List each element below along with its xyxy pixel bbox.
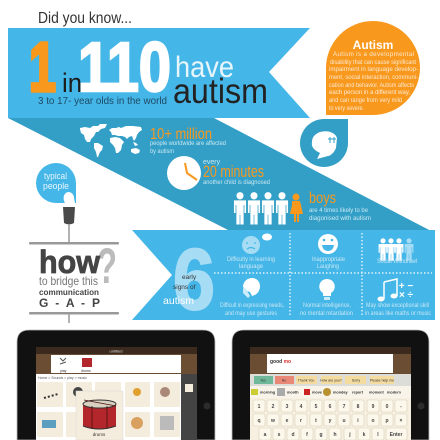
tablet: keyboard app: d xyxy=(291,432,295,438)
tablet: keyboard app: q xyxy=(257,418,261,424)
sign: normal intelligence: no mental retardation xyxy=(300,311,353,317)
tablet: keyboard app: 9 xyxy=(372,404,375,410)
tablet: keyboard app: No xyxy=(282,378,286,382)
panel: autism definition bubble: each person in a different way, xyxy=(329,89,410,96)
panel: how to bridge the gap: ? xyxy=(97,238,117,294)
panel: how to bridge the gap xyxy=(29,238,119,314)
big number 6: 6 xyxy=(173,232,215,328)
tablet: keyboard app: l xyxy=(377,432,379,438)
panel: autism definition bubble: Autism xyxy=(353,38,393,52)
tablet: symbol communication app: untitled xyxy=(110,348,122,354)
stat: 20 minutes xyxy=(203,159,270,186)
stat: boys xyxy=(309,190,371,222)
keyboard keys xyxy=(253,400,407,440)
tablet: keyboard app: monday xyxy=(333,390,348,394)
tablet: keyboard app: r xyxy=(300,418,302,424)
tablet: symbol communication app: drums xyxy=(81,369,91,373)
stat: 20 minutes: every xyxy=(203,159,221,166)
panel: autism definition bubble: cation and behavior. Autism affects xyxy=(329,82,414,89)
tablet: keyboard app: move xyxy=(312,390,322,394)
tablet: keyboard app: 8 xyxy=(357,404,360,410)
sign: social withdrawal xyxy=(377,238,417,265)
tablet: keyboard app: 3 xyxy=(286,404,289,410)
tablet: keyboard app: j xyxy=(348,432,351,438)
tablet: keyboard app: y xyxy=(329,418,332,424)
title: Did you know... xyxy=(38,10,132,27)
tablet: keyboard app: o xyxy=(371,418,375,424)
tablet: keyboard app: morning xyxy=(260,390,276,394)
early signs label: signs of xyxy=(173,284,196,291)
panel: autism definition bubble: and can range from very mild xyxy=(329,97,402,104)
stat: boys: diagonised with autism xyxy=(309,215,371,222)
tablet: keyboard app: Thank You xyxy=(298,378,314,382)
tablet: keyboard app: 1 xyxy=(258,404,261,410)
tablet: keyboard app: 2 xyxy=(272,404,275,410)
sign: difficulty in learning language: language xyxy=(239,264,264,270)
tablet: symbol communication app xyxy=(17,330,215,440)
early signs label xyxy=(163,274,197,307)
big number 110: 110 xyxy=(78,28,171,106)
sign: difficulty in learning language: Difficulty in learning xyxy=(227,257,275,263)
panel: how to bridge the gap: to bridge this xyxy=(39,274,98,288)
panel: dark blue statistics band xyxy=(8,118,433,232)
panel: autism definition bubble: Autism is a developmental xyxy=(333,51,414,58)
sign: expressing needs: and may use gestures xyxy=(225,311,277,317)
sign: exceptional skill: + − xyxy=(399,281,413,292)
stat: 20 minutes: 20 minutes xyxy=(203,163,264,181)
tablet: keyboard app: 4 xyxy=(300,404,303,410)
sign: inappropriate laughing: Laughing xyxy=(317,264,339,270)
tablet: keyboard app: t xyxy=(315,418,317,424)
panel: autism definition bubble: impairment in language develop- xyxy=(329,66,418,73)
tablet: keyboard app: s xyxy=(278,432,281,438)
tablet: keyboard app: e xyxy=(286,418,289,424)
stat: 20 minutes: another child is diagnosed xyxy=(203,179,270,186)
tablet: keyboard app: modern xyxy=(387,390,402,394)
tablet: keyboard app: Sorry xyxy=(352,378,360,382)
panel: six early signs xyxy=(132,230,435,328)
tablet: keyboard app: g xyxy=(319,432,323,438)
map: world xyxy=(80,124,142,157)
tablet: keyboard app: good mo xyxy=(270,359,291,365)
icon: four boys xyxy=(234,192,288,225)
sign: exceptional skill: in areas like maths or music xyxy=(365,311,431,317)
tablet: keyboard app: × xyxy=(400,418,403,424)
tablet: symbol communication app: drums xyxy=(93,432,106,437)
tablet: keyboard app: h xyxy=(333,432,337,438)
word: autism handwritten: autism xyxy=(173,72,268,111)
connector line xyxy=(68,224,70,323)
age caption: 3 to 17- year olds in the world xyxy=(38,95,167,107)
panel: top banner xyxy=(8,28,310,118)
icon: autistic head bubble xyxy=(300,119,348,167)
tablet: keyboard app: w xyxy=(270,418,275,424)
early signs label: autism xyxy=(163,295,194,307)
panel: how to bridge the gap: communication xyxy=(39,288,99,297)
tablet: keyboard app: month xyxy=(287,390,299,394)
panel: autism definition bubble: disability that can cause significant xyxy=(330,59,416,66)
callout: typical people xyxy=(36,163,76,203)
sign: inappropriate laughing xyxy=(312,234,346,270)
callout: typical people: people xyxy=(43,181,69,191)
stat: boys: are 4 times likely to be xyxy=(309,207,368,214)
sign: normal intelligence xyxy=(300,279,353,317)
big number 1: 1 xyxy=(29,28,56,106)
sign: social withdrawal: Social Withdrawl xyxy=(377,259,417,265)
sign: normal intelligence: Normal intelligence, xyxy=(303,303,351,309)
early signs label: early xyxy=(182,274,197,281)
tablet: symbol communication app: Home > Sounds > play > music xyxy=(38,376,87,380)
tablet: keyboard app: u xyxy=(342,418,346,424)
tablet: keyboard app: report xyxy=(352,390,364,394)
stat: 10+ million: 10+ million xyxy=(150,126,212,143)
word: in: in xyxy=(62,68,82,98)
sign: exceptional skill: × ÷ xyxy=(399,290,414,301)
tablet: keyboard app: How are you? xyxy=(320,378,342,382)
stat: 10+ million: people worldwide are affected xyxy=(150,140,226,147)
stat: 10+ million xyxy=(150,126,226,155)
tablet: keyboard app: k xyxy=(363,432,366,438)
tablet: symbol communication app: play xyxy=(60,369,67,373)
sign: exceptional skill: May show exceptional skill xyxy=(366,303,429,309)
tablet: keyboard app: moment xyxy=(369,390,385,394)
panel: autism definition bubble: ment, social interaction, communi- xyxy=(329,74,418,81)
stat: 10+ million: by autism xyxy=(150,148,174,155)
panel: autism definition bubble: to very severe. xyxy=(329,105,364,112)
panel: how to bridge the gap: how xyxy=(39,244,100,280)
sign: expressing needs xyxy=(220,278,284,317)
tablet: keyboard app: - xyxy=(400,404,402,410)
tablet: keyboard app: 0 xyxy=(386,404,389,410)
tablet: keyboard app: f xyxy=(306,432,308,438)
sign: exceptional skill xyxy=(365,279,431,317)
tablet: keyboard app: Please help me xyxy=(370,378,394,382)
sign: inappropriate laughing: Inappropriate xyxy=(312,257,346,263)
tablet: keyboard app: p xyxy=(385,418,389,424)
tablet: keyboard app: Yes xyxy=(260,378,266,382)
sign: difficulty in learning language xyxy=(227,234,275,270)
word: have: have xyxy=(175,51,234,84)
tablet: keyboard app: a xyxy=(264,432,267,438)
icon: clock xyxy=(167,156,201,190)
panel: autism definition bubble xyxy=(326,21,420,115)
tablet: keyboard app: 6 xyxy=(329,404,332,410)
tablet: keyboard app: 5 xyxy=(315,404,318,410)
tablet: keyboard app: Enter xyxy=(390,432,402,438)
tablet: keyboard app: i xyxy=(357,418,359,424)
icon: girl xyxy=(290,194,303,222)
callout: typical people: typical xyxy=(44,171,67,181)
panel: how to bridge the gap: G - A - P xyxy=(39,296,100,310)
tablet: keyboard app: 7 xyxy=(343,404,346,410)
tablet: keyboard app xyxy=(232,330,429,440)
sign: expressing needs: Difficult in expressing needs, xyxy=(220,303,284,309)
icon: communication device xyxy=(63,207,75,224)
stat: boys: boys xyxy=(309,190,336,207)
